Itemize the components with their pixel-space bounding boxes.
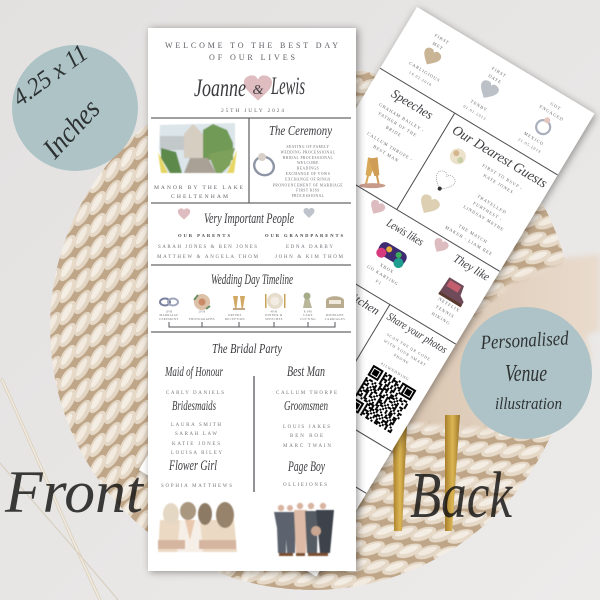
timeline labels: DRINKS bbox=[228, 313, 242, 317]
our dearest guests: Our Dearest Guests bbox=[449, 123, 550, 192]
timeline labels: MARRIAGE bbox=[159, 313, 179, 317]
right likes: HIKING bbox=[431, 311, 451, 326]
timeline labels: CARRIAGES bbox=[325, 317, 345, 321]
ceremony order: WEDDING PROCESSIONAL bbox=[281, 150, 335, 154]
our dearest guests: THE MATCH bbox=[458, 223, 489, 245]
groom side: Best Man bbox=[287, 364, 325, 380]
speeches: GRAHAM BAILEY - bbox=[378, 102, 426, 133]
left likes: GO KARTING bbox=[366, 264, 400, 287]
groom side bbox=[276, 364, 337, 488]
first date: DATE bbox=[487, 73, 503, 85]
first met: MET bbox=[432, 41, 444, 51]
icon: flower heart bbox=[415, 192, 442, 218]
bridal party heading: The Bridal Party bbox=[212, 342, 283, 357]
first date: 01.01.2013 bbox=[463, 104, 487, 121]
groom side: BEN ROE bbox=[290, 434, 323, 439]
speeches: BRIDE bbox=[385, 125, 403, 138]
label: back: Back bbox=[410, 459, 513, 532]
our dearest guests bbox=[407, 123, 550, 262]
couple names with heart: & bbox=[253, 83, 264, 98]
speeches bbox=[358, 83, 441, 169]
timeline labels: 4PM bbox=[271, 310, 277, 314]
bride side: SARAH LAW bbox=[175, 432, 217, 437]
timeline labels: SPEECHES bbox=[265, 317, 283, 321]
VIP names: MATTHEW & ANGELA THOM bbox=[157, 255, 259, 260]
left likes: Lewis likes bbox=[384, 215, 427, 249]
timeline labels: RECEPTION bbox=[225, 317, 245, 321]
icon: champagne glasses bbox=[359, 157, 385, 188]
timeline labels: PHOTOGRAPHS bbox=[189, 317, 215, 321]
QR code bbox=[348, 366, 416, 432]
title: WELCOME TO THE BEST DAY bbox=[165, 41, 338, 50]
speeches: CALLUM THROPE - bbox=[366, 131, 414, 162]
our dearest guests: FIRST TO RSVP - bbox=[481, 163, 524, 191]
VIP heading and hearts bbox=[178, 208, 314, 227]
our dearest guests: FURTHEST - bbox=[472, 200, 504, 222]
bride side: SOPHIA MATTHEWS bbox=[161, 484, 232, 489]
gold pens bbox=[393, 415, 460, 531]
callout: size circle bbox=[8, 39, 138, 171]
ceremony order: SEATING OF FAMILY bbox=[286, 145, 330, 149]
first date: FIRST bbox=[491, 66, 508, 79]
bride side: CARLY DANIELS bbox=[166, 391, 224, 396]
panel: front of programme bbox=[148, 28, 356, 571]
illustration: groomsmen bbox=[274, 503, 334, 556]
bride side: Flower Girl bbox=[168, 458, 217, 474]
bride side bbox=[161, 365, 232, 489]
speeches: FATHER OF THE bbox=[378, 111, 418, 138]
illustration: bridesmaids bbox=[158, 502, 237, 552]
bride side: Maid of Honour bbox=[164, 365, 223, 380]
icon: ring bbox=[251, 153, 277, 178]
timeline labels: MIDNIGHT bbox=[326, 313, 344, 317]
couple names with heart bbox=[194, 73, 305, 102]
groom side: Page Boy bbox=[287, 459, 325, 475]
woven rope mat bbox=[50, 66, 574, 590]
groom side: Groomsmen bbox=[284, 399, 328, 414]
first met: CARLIGIOUS bbox=[408, 60, 441, 83]
peach fabric bbox=[385, 254, 600, 429]
share your photos: #ILWEDDING bbox=[380, 362, 410, 382]
share your photos: SCAN THE QR CODE bbox=[386, 333, 431, 362]
our dearest guests: LINDSAY METHE bbox=[463, 204, 505, 232]
first met: 19.02.2018 bbox=[408, 71, 433, 87]
callout: size circle: 4.25 x 11 bbox=[8, 39, 93, 112]
got engaged: ENGAGED bbox=[539, 104, 565, 122]
VIP names bbox=[157, 233, 344, 260]
share your photos: WITH YOUR SMART bbox=[383, 339, 427, 368]
timeline labels: CUTTING bbox=[300, 317, 316, 321]
share your photos bbox=[364, 311, 449, 391]
bride side: LAURA SMITH bbox=[171, 423, 221, 428]
share your photos: PHONE bbox=[393, 353, 410, 365]
got engaged: 21.05.2019 bbox=[517, 137, 542, 154]
couple names with heart: Lewis bbox=[270, 73, 305, 100]
share your photos: Share your photos bbox=[385, 311, 449, 356]
VIP names: SARAH JONES & BEN JONES bbox=[158, 245, 257, 250]
VIP names: OUR PARENTS bbox=[178, 233, 230, 238]
right likes bbox=[423, 251, 493, 331]
icon: pink hearts bbox=[367, 198, 450, 256]
ceremony order bbox=[273, 145, 343, 198]
ceremony order: PROCESSIONAL bbox=[292, 194, 324, 198]
groom side: CALLUM THORPE bbox=[276, 391, 337, 396]
label: front: Front bbox=[4, 459, 144, 525]
left likes: F1 bbox=[375, 278, 383, 286]
callout: personalised venue circle bbox=[460, 307, 592, 439]
timeline heading: Wedding Day Timeline bbox=[211, 272, 293, 288]
date: 25TH JULY 2024 bbox=[221, 108, 284, 114]
venue illustration bbox=[158, 123, 237, 173]
centre divider bbox=[253, 376, 255, 492]
speeches: Speeches bbox=[389, 86, 436, 122]
right likes: TENNIS bbox=[435, 304, 455, 319]
dried straw stems bbox=[0, 380, 118, 600]
venue name bbox=[154, 185, 244, 200]
venue name: CHELTENHAM bbox=[171, 194, 228, 200]
first date bbox=[463, 63, 512, 121]
callout: personalised venue circle: illustration bbox=[495, 394, 562, 413]
got engaged: MEXICO bbox=[523, 131, 545, 147]
ceremony heading: The Ceremony bbox=[269, 124, 333, 139]
ceremony order: WELCOME bbox=[297, 161, 319, 165]
timeline labels: DINNER & bbox=[265, 313, 283, 317]
VIP heading and hearts: Very Important People bbox=[204, 211, 294, 227]
left likes: XBOX bbox=[379, 262, 395, 275]
bride side: KATIE JONES bbox=[172, 442, 220, 447]
our dearest guests: KATE JONES bbox=[483, 173, 515, 195]
right likes: They like bbox=[451, 251, 493, 284]
bride side: LOUISA RILEY bbox=[171, 451, 222, 456]
ceremony order: EXCHANGE OF VOWS bbox=[286, 172, 330, 176]
couple names with heart: Joanne bbox=[194, 75, 246, 102]
timeline labels: 2PM bbox=[199, 310, 205, 314]
timeline labels: CAKE bbox=[303, 313, 313, 317]
timeline labels: 8 PM bbox=[304, 310, 312, 314]
ceremony order: READINGS bbox=[297, 166, 319, 170]
VIP names: OUR GRANDPARENTS bbox=[265, 233, 343, 238]
ceremony order: PRONOUNCEMENT OF MARRIAGE bbox=[273, 184, 343, 188]
our dearest guests: MAKER - LIAM BEE bbox=[444, 225, 494, 257]
ceremony order: FIRST KISS bbox=[296, 188, 320, 192]
groom side: OLLIEJONES bbox=[283, 483, 327, 488]
VIP names: EDNA DARBY bbox=[286, 245, 333, 250]
timeline bracket bbox=[169, 322, 335, 327]
first met: FIRST bbox=[434, 33, 450, 45]
right likes: NETFLIX bbox=[437, 296, 461, 313]
timeline labels: CEREMONY bbox=[159, 317, 179, 321]
partial heading hidden behind front: Kitchen bbox=[342, 286, 382, 318]
timeline labels bbox=[159, 310, 345, 321]
icon: bee heart bbox=[430, 169, 457, 195]
title bbox=[165, 41, 338, 62]
speeches: BEST MAN bbox=[372, 144, 400, 163]
ceremony order: EXCHANGE OF RINGS bbox=[285, 178, 331, 182]
icon: game controller bbox=[374, 240, 409, 270]
got engaged bbox=[517, 96, 569, 156]
venue name: MANOR BY THE LAKE bbox=[154, 185, 244, 191]
timeline icons bbox=[160, 292, 344, 310]
groom side: LOUIS JAKES bbox=[283, 425, 330, 430]
panel: back of programme bbox=[139, 7, 594, 576]
first date: TENBY bbox=[470, 98, 489, 113]
groom side: MARC TWAIN bbox=[283, 444, 331, 449]
timeline labels: 1PM bbox=[166, 310, 172, 314]
our dearest guests: TRAVELLED bbox=[476, 194, 508, 215]
first met bbox=[404, 29, 460, 90]
bride side: Bridesmaids bbox=[172, 399, 216, 414]
ceremony order: BRIDAL PROCESSIONAL bbox=[283, 156, 333, 160]
icon: boots bbox=[438, 277, 471, 307]
title: OF OUR LIVES bbox=[209, 53, 295, 62]
callout: personalised venue circle: Personalised bbox=[479, 327, 570, 354]
callout: personalised venue circle: Venue bbox=[505, 361, 547, 387]
callout: size circle: Inches bbox=[36, 93, 106, 165]
left likes bbox=[357, 215, 427, 294]
VIP names: JOHN & KIM THOM bbox=[275, 255, 344, 260]
icon: bouquet bbox=[447, 145, 469, 167]
got engaged: GOT bbox=[549, 101, 562, 111]
